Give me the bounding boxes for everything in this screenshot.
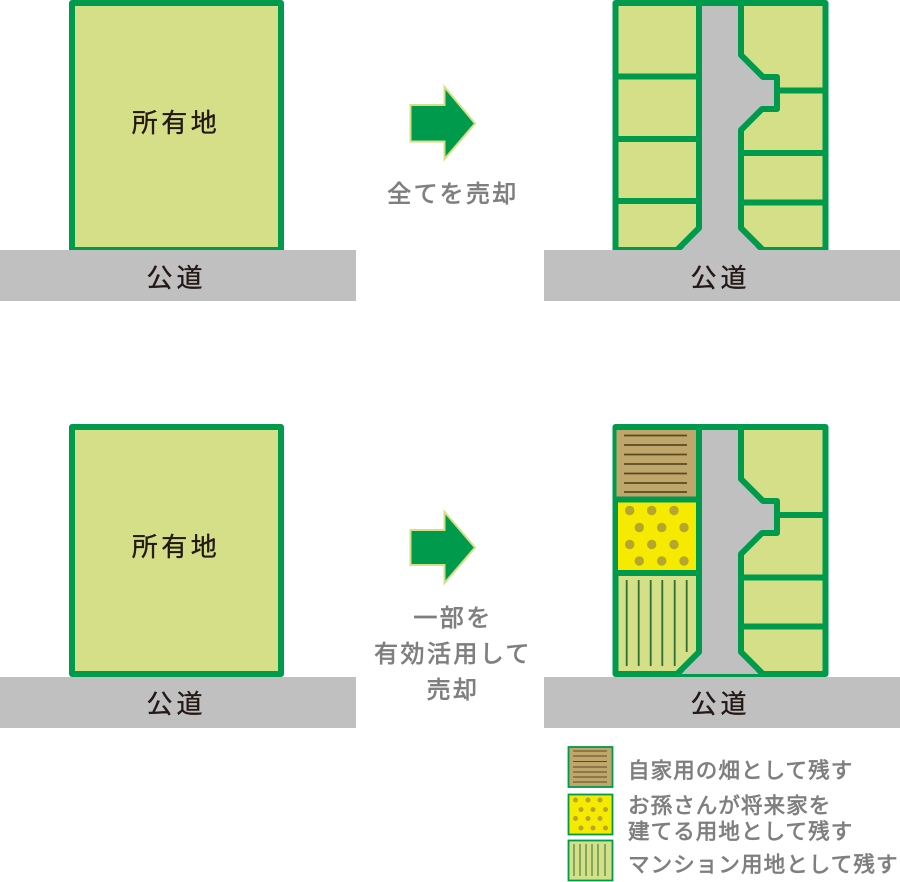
legend swatch: apartment: [568, 840, 612, 880]
lot: owned land: [72, 3, 281, 250]
legend swatch: home site: [568, 794, 612, 834]
label: public road: 公道: [690, 263, 751, 293]
panel: top left, whole lot: [0, 3, 356, 301]
lot dividers: [616, 500, 826, 626]
legend text: field: 自家用の畑として残す: [628, 759, 853, 783]
road: public road: [0, 677, 356, 728]
road: public road: [544, 677, 900, 728]
road: public road: [544, 250, 900, 301]
private access road: [677, 427, 777, 674]
panel: bottom left, whole lot: [0, 427, 356, 728]
legend text: home site line 2: 建てる用地として残す: [628, 820, 853, 844]
road edge cover: [682, 670, 758, 674]
lot background: [616, 3, 826, 250]
plot: apartment site stripes: [627, 580, 687, 666]
label: public road: 公道: [146, 689, 207, 719]
legend: [568, 747, 899, 880]
lot: owned land: [72, 427, 281, 674]
label: owned land: 所有地: [132, 532, 220, 562]
label: owned land: 所有地: [132, 108, 220, 138]
panel: bottom right, partly used lot: [544, 427, 900, 728]
label: public road: 公道: [690, 689, 751, 719]
road: public road: [0, 250, 356, 301]
plot: family field: [616, 430, 698, 497]
arrow: sell everything: [410, 87, 475, 159]
plot: grandchild's home site: [618, 502, 695, 570]
legend swatch: field: [568, 747, 612, 787]
road edge cover: [682, 246, 758, 250]
caption: partial use line 3: 売却: [427, 677, 479, 704]
private access road: [677, 3, 777, 250]
label: public road: 公道: [146, 263, 207, 293]
lot background: [616, 427, 826, 674]
legend text: home site line 1: お孫さんが将来家を: [628, 794, 831, 818]
caption: partial use: 一部を: [413, 605, 493, 632]
arrow: partial use: [410, 512, 475, 583]
caption: sell everything: 全てを売却: [387, 181, 519, 208]
caption: partial use line 2: 有効活用して: [374, 641, 532, 668]
panel: top right, subdivided lot: [544, 3, 900, 301]
legend text: apartment: マンション用地として残す: [628, 853, 899, 877]
lot dividers: [616, 76, 826, 202]
